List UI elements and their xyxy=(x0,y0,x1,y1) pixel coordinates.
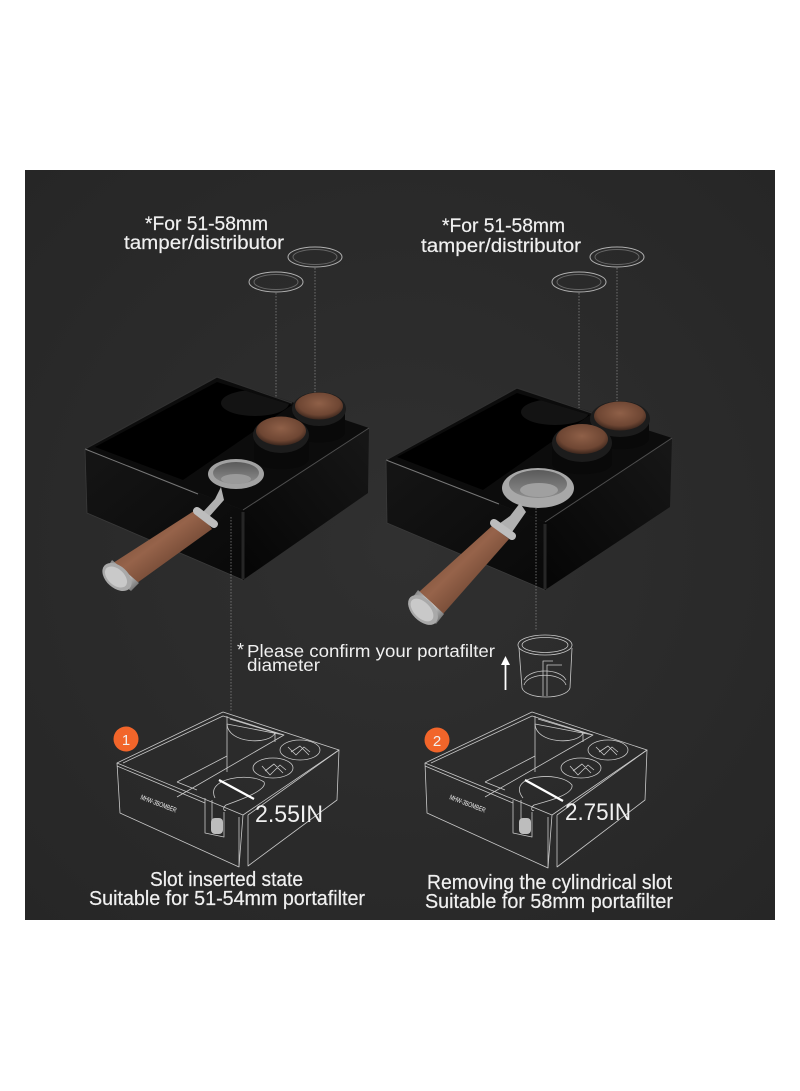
portafilter handle xyxy=(97,509,214,597)
caption 1: Slot inserted state xyxy=(150,869,303,891)
heading: right tamper note: *For 51-58mm xyxy=(442,216,565,237)
engraved logo 1: MHW-3BOMBER xyxy=(139,794,177,814)
engraved logo 2: MHW-3BOMBER xyxy=(448,794,486,814)
heading: left tamper note: *For 51-58mm xyxy=(145,214,268,235)
note: confirm portafilter diameter: * xyxy=(237,640,244,660)
badge 2: 2 xyxy=(433,733,441,750)
caption 1: Suitable for 51-54mm portafilter xyxy=(89,888,365,910)
note: confirm portafilter diameter xyxy=(237,640,495,675)
guide line: left box to wireframe xyxy=(230,517,232,712)
caption 1 xyxy=(89,869,365,910)
front tamper xyxy=(552,424,612,474)
wireframe 2: slot removed xyxy=(425,712,647,868)
icon: cylindrical slot wireframe xyxy=(518,635,572,697)
right product: knock box with portafilter and tampers xyxy=(386,388,672,631)
heading: right tamper note xyxy=(421,216,582,257)
portafilter basket xyxy=(203,459,264,517)
front tamper xyxy=(253,416,309,469)
rear tamper xyxy=(590,401,650,449)
rear tamper xyxy=(292,392,346,442)
icon: left tamper rings with guide lines xyxy=(249,247,342,420)
portafilter basket xyxy=(496,468,574,535)
guide line: right box to slot xyxy=(535,508,537,630)
badge 2 xyxy=(424,728,450,752)
wireframe 1: slot inserted xyxy=(117,712,339,867)
note: confirm portafilter diameter: diameter xyxy=(247,655,320,675)
dimension 2.55IN: 2.55IN xyxy=(255,801,323,828)
portafilter handle xyxy=(402,523,512,631)
note: confirm portafilter diameter: Please confirm your portafilter xyxy=(247,641,495,661)
arrow: lift slot up xyxy=(501,656,510,690)
heading: left tamper note: tamper/distributor xyxy=(124,233,285,254)
caption 2 xyxy=(425,872,673,913)
heading: right tamper note: tamper/distributor xyxy=(421,236,582,257)
caption 2: Removing the cylindrical slot xyxy=(427,872,672,894)
badge 1: 1 xyxy=(122,732,130,749)
caption 2: Suitable for 58mm portafilter xyxy=(425,891,673,913)
dimension 2.75IN: 2.75IN xyxy=(565,799,631,826)
badge 1 xyxy=(114,726,138,752)
background panel xyxy=(25,170,775,920)
icon: right tamper rings with guide lines xyxy=(552,247,644,428)
heading: left tamper note xyxy=(124,214,285,254)
left product: knock box with portafilter and tampers xyxy=(85,377,369,597)
